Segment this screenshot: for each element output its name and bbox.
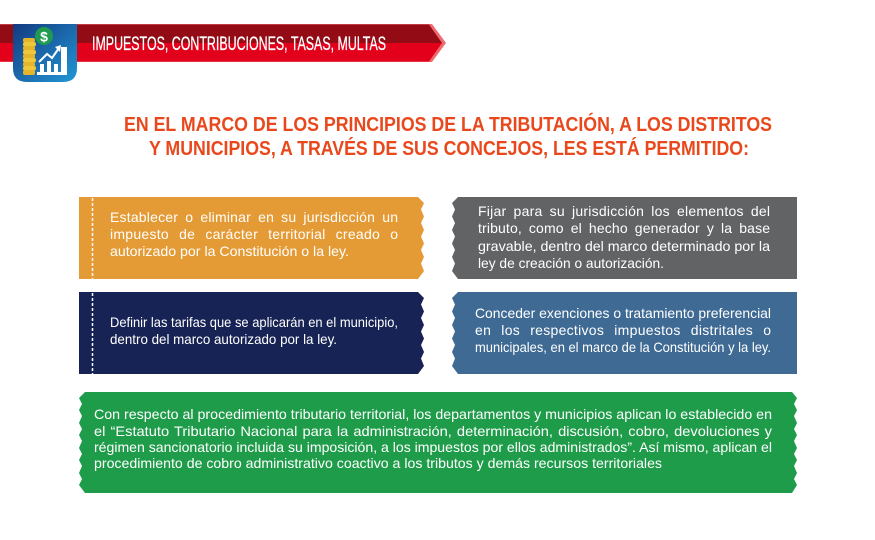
icon: dollar badge: $ (40, 28, 48, 44)
icon: coin stack (23, 38, 36, 75)
text: establecer (110, 209, 398, 259)
text: conceder: municipales, en el marco de la Constitución y la ley. (475, 339, 771, 355)
text: conceder: en los respectivos impuestos distritales o (475, 322, 771, 338)
text: definir (110, 314, 398, 347)
text: establecer: Establecer o eliminar en su jurisdicción un (110, 209, 398, 225)
text: establecer: autorizado por la Constitución o la ley. (110, 243, 349, 259)
title (124, 112, 772, 160)
text: fijar: Fijar para su jurisdicción los elementos del (478, 203, 770, 219)
text: procedimiento: el “Estatuto Tributario Nacional para la administración, determinación, discusión, cobro, devoluciones y (94, 423, 772, 439)
header banner (0, 24, 446, 62)
banner title: IMPUESTOS, CONTRIBUCIONES, TASAS, MULTAS (92, 34, 386, 55)
panel: definir las tarifas (79, 292, 424, 374)
text: procedimiento (94, 406, 772, 471)
panel: procedimiento tributario (79, 392, 797, 493)
text: procedimiento: Con respecto al procedimiento tributario territorial, los departamentos y municipios aplican lo establecido en (94, 406, 772, 422)
text: conceder (475, 305, 771, 355)
icon: coins and growth chart (13, 24, 77, 82)
icon: bar chart with arrow (37, 45, 67, 75)
panel: establecer o eliminar (79, 197, 424, 279)
text: fijar: ley de creación o autorización. (478, 255, 664, 271)
panel: conceder exenciones (452, 292, 797, 374)
panel: fijar elementos del tributo (452, 197, 797, 279)
text: fijar (478, 203, 770, 271)
title: EN EL MARCO DE LOS PRINCIPIOS DE LA TRIBUTACIÓN, A LOS DISTRITOS (124, 112, 772, 136)
text: procedimiento: procedimiento de cobro administrativo coactivo a los tributos y demás recursos territoriales (94, 455, 662, 471)
text: fijar: gravable, dentro del marco determinado por la (478, 238, 770, 254)
title: Y MUNICIPIOS, A TRAVÉS DE SUS CONCEJOS, LES ESTÁ PERMITIDO: (149, 137, 749, 160)
text: conceder: Conceder exenciones o tratamiento preferencial (475, 305, 771, 321)
text: fijar: tributo, como el hecho generador y la base (478, 220, 770, 236)
text: establecer: impuesto de carácter territorial creado o (110, 226, 398, 242)
text: procedimiento: régimen sancionatorio incluida su imposición, a los impuestos por ellos administrados”. Así mismo, aplican el (94, 439, 772, 455)
text: definir: Definir las tarifas que se aplicarán en el municipio, (110, 314, 398, 330)
text: definir: dentro del marco autorizado por la ley. (110, 331, 337, 347)
